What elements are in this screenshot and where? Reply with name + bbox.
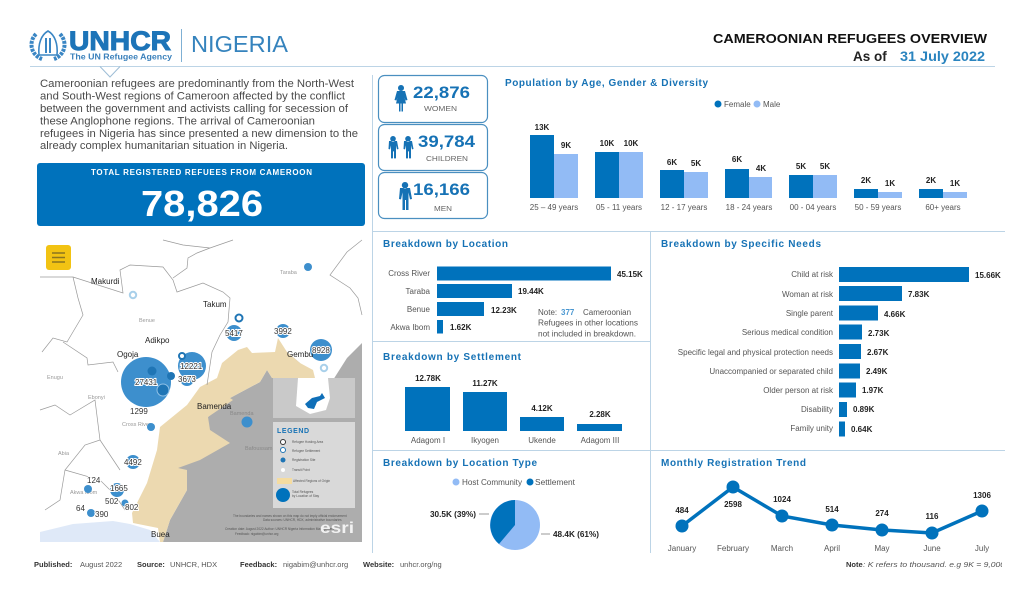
logo divider	[181, 29, 182, 62]
age labels: 00 - 04 years	[790, 203, 836, 212]
total refugees panel	[37, 163, 365, 226]
card: women	[378, 76, 488, 122]
legend: Female	[724, 100, 751, 109]
esri mark: esri	[320, 520, 354, 537]
need labels: Disability	[801, 405, 833, 414]
grey boundary text	[47, 270, 298, 496]
values: 2.28K	[589, 410, 611, 419]
intro paragraph: these Anglophone regions. The arrival of Cameroonian	[40, 116, 315, 128]
inset map	[273, 378, 355, 418]
values: 11.27K	[472, 379, 498, 388]
grey boundary text: Ebonyi	[88, 395, 105, 401]
months: June	[923, 544, 941, 553]
map legend: Transit Point	[292, 468, 310, 472]
bar values: 1K	[950, 179, 960, 188]
total label: TOTAL REGISTERED REFUEES FROM CAMEROON	[91, 168, 312, 177]
age labels: 18 - 24 years	[726, 203, 772, 212]
intro paragraph: and South-West regions of Cameroon affected by the conflict	[40, 90, 346, 102]
note: not included in breakdown.	[538, 330, 636, 338]
note: 377	[561, 308, 575, 317]
footer: Feedback:	[240, 560, 277, 569]
intro paragraph	[40, 78, 358, 152]
bar values: 1K	[885, 179, 895, 188]
neighbouring grey territory	[163, 343, 362, 542]
icon: UNHCR wreath	[31, 31, 65, 59]
place names: Gembu	[287, 350, 313, 359]
months: February	[717, 544, 749, 553]
pie labels	[430, 510, 599, 539]
map legend	[273, 422, 355, 508]
bubble values: 8928	[312, 346, 330, 355]
values	[851, 271, 1001, 434]
settlement labels: Ukende	[528, 436, 556, 445]
UNHCR wordmark: UNHCR	[69, 26, 171, 56]
place names: Takum	[203, 300, 227, 309]
footer: UNHCR, HDX	[170, 560, 217, 569]
map credits: Feedback: nigabim@unhcr.org	[235, 532, 279, 536]
values: 4.12K	[531, 404, 553, 413]
place names: Adikpo	[145, 336, 170, 345]
map legend: Affected Regions of Origin	[293, 479, 330, 483]
women label: WOMEN	[424, 104, 457, 113]
map legend: Registration Site	[292, 458, 316, 462]
heading: Breakdown by Location Type	[383, 458, 537, 469]
values: 12.23K	[491, 306, 517, 315]
months: May	[874, 544, 890, 553]
months: March	[771, 544, 793, 553]
bar values	[535, 123, 960, 188]
values	[415, 374, 611, 419]
heading: Population by Age, Gender & Diversity	[505, 78, 708, 89]
months: April	[824, 544, 840, 553]
grey boundary text: Akwa Ibom	[70, 490, 98, 496]
note	[538, 308, 638, 338]
state boundaries	[40, 240, 362, 510]
bar values: 10K	[600, 139, 615, 148]
grey boundary text: Abia	[58, 451, 70, 457]
chart: monthly trend	[661, 458, 991, 553]
card: men	[378, 172, 488, 218]
pie	[490, 500, 540, 550]
grey boundary text: Bamenda	[230, 411, 254, 417]
map legend: Total Refugees	[292, 490, 314, 494]
need labels: Specific legal and physical protection needs	[678, 348, 833, 357]
intro paragraph: already complex humanitarian situation in Nigeria.	[40, 140, 288, 152]
sea	[40, 521, 160, 542]
map credits	[225, 514, 347, 536]
agency tagline: The UN Refugee Agency	[70, 52, 172, 62]
bubble values: 4492	[124, 458, 142, 467]
bar values: 10K	[624, 139, 639, 148]
map markers	[130, 292, 327, 396]
footer: unhcr.org/ng	[400, 560, 442, 569]
bubble values: 64	[76, 504, 85, 513]
legend	[714, 100, 781, 109]
heading: Breakdown by Settlement	[383, 352, 522, 363]
header logo	[31, 26, 289, 62]
chart: population by age	[505, 78, 967, 212]
bubble values: 3992	[274, 327, 292, 336]
title: CAMEROONIAN REFUGEES OVERVIEW	[713, 31, 988, 46]
bars	[530, 135, 967, 198]
values: 12.78K	[415, 374, 441, 383]
months: July	[975, 544, 989, 553]
months: January	[668, 544, 696, 553]
need labels: Unaccompanied or separated child	[709, 367, 833, 376]
bar values: 5K	[820, 162, 830, 171]
footer: August 2022	[80, 560, 122, 569]
card: children	[378, 124, 488, 170]
bar values: 5K	[796, 162, 806, 171]
state labels	[388, 269, 431, 332]
report title	[713, 31, 988, 64]
age labels: 25 – 49 years	[530, 203, 578, 212]
icon: woman	[394, 85, 408, 112]
bubble values: 390	[95, 510, 109, 519]
age labels	[530, 203, 961, 212]
map legend: Refugee Hosting Area	[292, 440, 323, 444]
chart: location type	[383, 458, 599, 550]
children count: 39,784	[418, 132, 476, 151]
place names	[91, 277, 313, 539]
need labels	[678, 270, 834, 433]
line	[682, 487, 982, 533]
children label: CHILDREN	[426, 154, 468, 163]
footer: Website:	[363, 560, 394, 569]
need labels: Woman at risk	[782, 290, 834, 299]
bubble values: 1299	[130, 407, 148, 416]
icon: man	[399, 182, 412, 210]
bar values: 2K	[926, 176, 936, 185]
legend: Settlement	[535, 478, 576, 487]
legend heading: LEGEND	[277, 428, 309, 435]
women count: 22,876	[413, 83, 470, 102]
chart: breakdown by settlement	[383, 352, 622, 445]
legend: Male	[763, 100, 781, 109]
state labels: Cross River	[388, 269, 430, 278]
map legend: by Location of Stay	[292, 494, 320, 498]
settlement labels	[411, 436, 619, 445]
points	[676, 480, 988, 540]
total number: 78,826	[141, 183, 263, 224]
values: 1.97K	[862, 386, 884, 395]
values: 514	[825, 505, 839, 514]
values: 15.66K	[975, 271, 1001, 280]
bars	[405, 387, 622, 431]
bar values: 6K	[667, 158, 677, 167]
bar values: 5K	[691, 159, 701, 168]
legend	[452, 478, 576, 487]
pie labels: 48.4K (61%)	[553, 530, 599, 539]
footer: Note	[846, 560, 863, 569]
values	[450, 270, 643, 332]
chart: breakdown by location	[383, 239, 643, 338]
age labels: 60+ years	[925, 203, 961, 212]
pie labels: 30.5K (39%)	[430, 510, 476, 519]
need labels: Older person at risk	[763, 386, 834, 395]
values	[675, 491, 991, 521]
bubble values: 502	[105, 497, 119, 506]
values: 1024	[773, 495, 791, 504]
Cameroon study area	[132, 338, 315, 542]
date: 31 July 2022	[900, 49, 985, 64]
map bubbles	[84, 263, 332, 517]
map	[40, 239, 362, 542]
bars	[437, 266, 611, 334]
grey boundary text: Enugu	[47, 375, 63, 381]
place names: Buea	[151, 530, 170, 539]
bubble values	[76, 327, 330, 519]
values: 2.49K	[866, 367, 888, 376]
values: 0.64K	[851, 425, 873, 434]
men count: 16,166	[413, 180, 470, 199]
values: 4.66K	[884, 310, 906, 319]
men label: MEN	[434, 204, 452, 213]
bubble values: 27431	[135, 378, 158, 387]
values: 1306	[973, 491, 991, 500]
need labels: Child at risk	[791, 270, 834, 279]
bar values: 6K	[732, 155, 742, 164]
age labels: 12 - 17 years	[661, 203, 707, 212]
age labels: 05 - 11 years	[596, 203, 642, 212]
bubble values: 3673	[178, 375, 196, 384]
settlement labels: Adagom III	[581, 436, 619, 445]
chart: specific needs	[661, 239, 1001, 436]
bubble values: 12221	[180, 362, 203, 371]
intro paragraph: between the government and activists calling for secession of	[40, 103, 349, 115]
note: Refugees in other locations	[538, 318, 638, 328]
map menu button	[46, 245, 71, 270]
map legend: Refugee Settlement	[292, 449, 320, 453]
bar values: 9K	[561, 141, 571, 150]
footer	[34, 558, 1024, 572]
values: 2598	[724, 500, 742, 509]
legend: Host Community	[462, 478, 522, 487]
grey boundary text: Cross River	[122, 422, 151, 428]
months	[668, 544, 989, 553]
intro paragraph: refugees in Nigeria has since presented a new dimension to the	[40, 128, 358, 140]
bar values: 4K	[756, 164, 766, 173]
map credits: Creation date: August 2022 Author: UNHCR Nigeria Information Management	[225, 527, 334, 531]
footer: Source:	[137, 560, 165, 569]
values: 2.73K	[868, 329, 890, 338]
values: 0.89K	[853, 405, 875, 414]
values: 7.83K	[908, 290, 930, 299]
need labels: Family unity	[790, 424, 833, 433]
place names: Ogoja	[117, 350, 139, 359]
map credits: Data sources: UNHCR, HDX, administrative boundaries	[263, 518, 342, 522]
bubble values: 5417	[225, 329, 243, 338]
state labels: Benue	[407, 305, 431, 314]
grey boundary text: Benue	[139, 318, 155, 324]
place names: Makurdi	[91, 277, 120, 286]
values: 45.15K	[617, 270, 643, 279]
values: 2.67K	[867, 348, 889, 357]
heading: Breakdown by Location	[383, 239, 508, 250]
date prefix: As of	[853, 49, 887, 64]
values: 484	[675, 506, 689, 515]
bubble values: 1665	[110, 484, 128, 493]
footer: nigabim@unhcr.org	[283, 560, 348, 569]
footer: : K refers to thousand. e.g 9K = 9,000	[863, 560, 1006, 569]
country name: NIGERIA	[191, 31, 289, 57]
bubble values: 124	[87, 476, 101, 485]
bar values: 13K	[535, 123, 550, 132]
values: 1.62K	[450, 323, 472, 332]
settlement labels: Ikyogen	[471, 436, 499, 445]
note: Note:	[538, 308, 557, 317]
need labels: Single parent	[786, 309, 834, 318]
values: 116	[926, 512, 939, 521]
age labels: 50 - 59 years	[855, 203, 901, 212]
place names: Bamenda	[197, 402, 232, 411]
settlement labels: Adagom I	[411, 436, 445, 445]
map credits: The boundaries and names shown on this map do not imply official endorsement	[233, 514, 347, 518]
heading: Breakdown by Specific Needs	[661, 239, 821, 250]
icon: children	[388, 136, 414, 158]
values: 274	[875, 509, 889, 518]
panel dividers	[30, 66, 1005, 553]
heading: Monthly Registration Trend	[661, 458, 806, 469]
need labels: Serious medical condition	[742, 328, 833, 337]
bubble values: 802	[125, 503, 139, 512]
values: 19.44K	[518, 287, 544, 296]
bars	[839, 267, 969, 436]
note: Cameroonian	[583, 308, 631, 317]
grey boundary text: Taraba	[280, 270, 298, 276]
intro paragraph: Cameroonian refugees are predominantly from the North-West	[40, 78, 355, 90]
state labels: Taraba	[406, 287, 431, 296]
footer: Published:	[34, 560, 72, 569]
state labels: Akwa Ibom	[390, 323, 430, 332]
bar values: 2K	[861, 176, 871, 185]
grey boundary text: Bafoussam	[245, 446, 273, 452]
